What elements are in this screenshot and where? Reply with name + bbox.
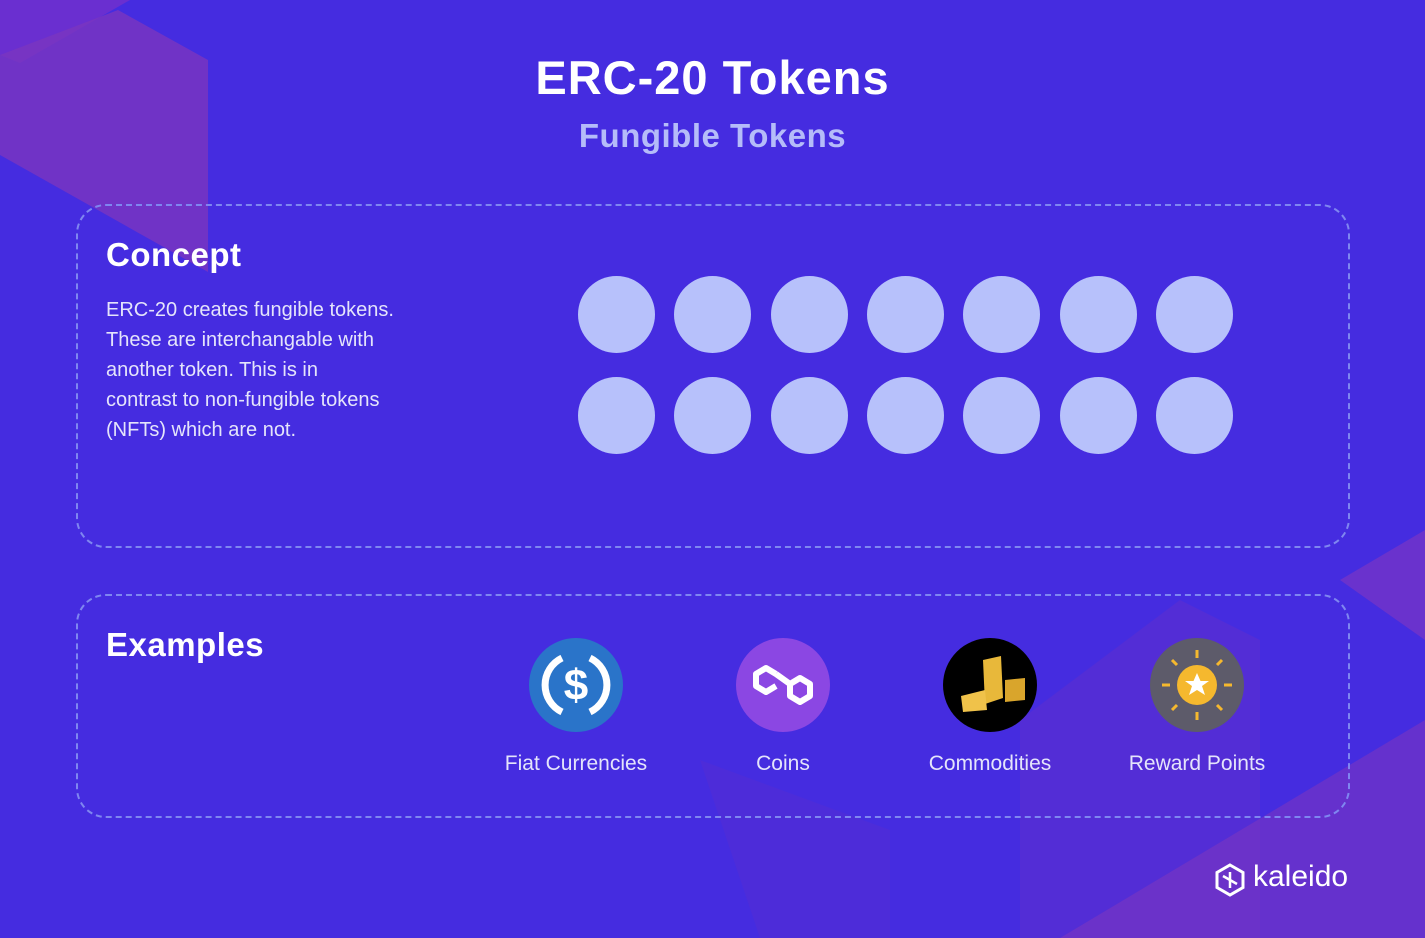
icon: reward points (1150, 638, 1244, 732)
subtitle: Fungible Tokens (579, 117, 846, 154)
icon: coins (736, 638, 830, 732)
label: commodities: Commodities (929, 752, 1051, 775)
concept text: ERC-20 creates fungible tokens. (106, 299, 394, 321)
concept text: another token. This is in (106, 359, 318, 381)
label: fiat currencies: Fiat Currencies (505, 752, 647, 775)
label: coins: Coins (756, 752, 810, 775)
token circles grid (578, 276, 1233, 454)
concept text (106, 299, 394, 441)
panel: examples (76, 594, 1350, 818)
concept text: These are interchangable with (106, 329, 374, 351)
icon: fiat currency (529, 638, 623, 732)
icon: fiat currency: $ (564, 661, 588, 710)
label: reward points: Reward Points (1129, 752, 1265, 775)
concept text: (NFTs) which are not. (106, 419, 296, 441)
logo: kaleido: kaleido (1253, 860, 1348, 893)
heading: concept: Concept (106, 236, 242, 273)
icon: commodities (943, 638, 1037, 732)
heading: examples: Examples (106, 626, 264, 663)
title: ERC-20 Tokens (535, 51, 890, 104)
panel: concept (76, 204, 1350, 548)
logo: kaleido (1216, 860, 1348, 897)
concept text: contrast to non-fungible tokens (106, 389, 380, 411)
